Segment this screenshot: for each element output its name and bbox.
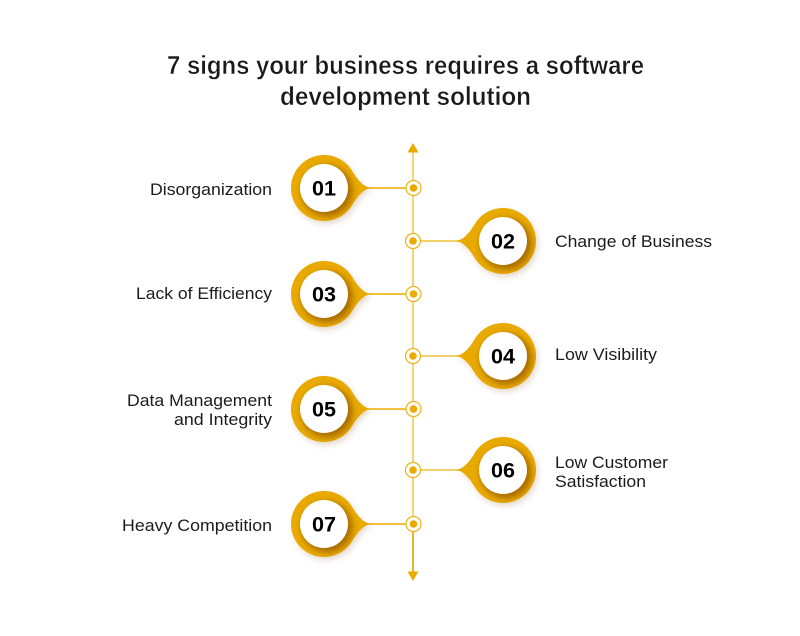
item 05: Data Management and Integrity: Data Management (127, 391, 272, 410)
item 03: Lack of Efficiency: Lack of Efficiency (136, 284, 273, 303)
item 02: Change of Business: Change of Business (555, 232, 712, 251)
item 01: Disorganization: 01 (312, 178, 336, 200)
item 01: Disorganization (150, 155, 421, 221)
title: development solution (280, 81, 531, 111)
item 04: Low Visibility: 04 (491, 346, 515, 368)
title: 7 signs your business requires a software (167, 50, 644, 80)
item 04: Low Visibility: Low Visibility (555, 345, 658, 364)
item 05: Data Management and Integrity: and Integrity (174, 410, 273, 429)
item 07: Heavy Competition (122, 491, 421, 557)
item 03: Lack of Efficiency: 03 (312, 284, 336, 306)
title (167, 50, 644, 111)
item 05: Data Management and Integrity (127, 376, 421, 442)
timeline axis with arrows (408, 143, 418, 581)
item 06: Low Customer Satisfaction: Satisfaction (555, 472, 646, 491)
item 04: Low Visibility (406, 323, 658, 389)
item 06: Low Customer Satisfaction: Low Customer (555, 453, 668, 472)
item 03: Lack of Efficiency (136, 261, 421, 327)
item 02: Change of Business (406, 208, 712, 274)
item 06: Low Customer Satisfaction (406, 437, 668, 503)
item 02: Change of Business: 02 (491, 230, 515, 254)
item 07: Heavy Competition: Heavy Competition (122, 516, 272, 535)
item 05: Data Management and Integrity: 05 (312, 398, 336, 422)
item 06: Low Customer Satisfaction: 06 (491, 460, 515, 482)
item 01: Disorganization: Disorganization (150, 180, 272, 199)
item 07: Heavy Competition: 07 (312, 514, 336, 536)
